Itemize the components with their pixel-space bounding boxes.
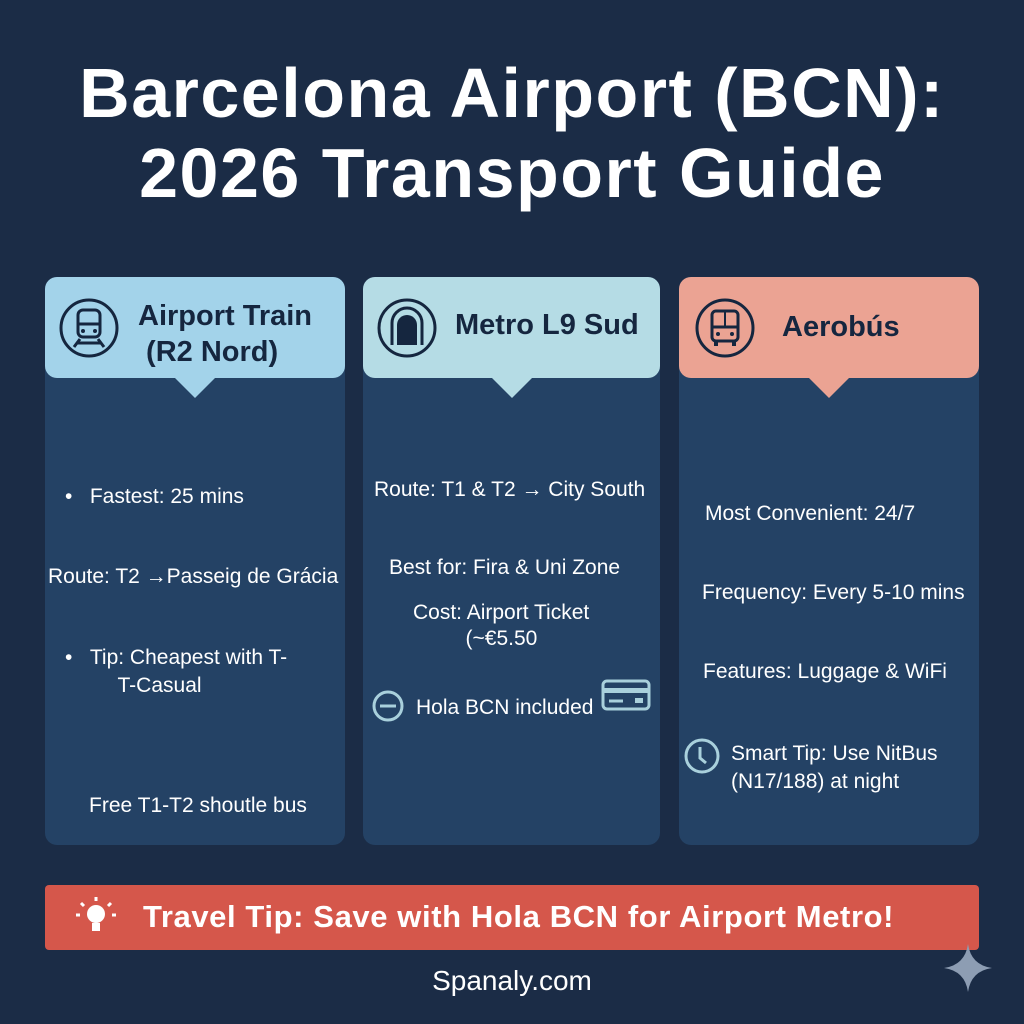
- icon: lightbulb: [76, 897, 116, 931]
- icon: bus: [696, 298, 754, 358]
- header: metro: [363, 277, 660, 378]
- text: smart tip: (N17/188) at night: [731, 770, 899, 793]
- icon: card: [602, 680, 650, 710]
- text: fastest: • Fastest: 25 mins: [65, 485, 244, 508]
- text: convenient: Most Convenient: 24/7: [705, 502, 915, 525]
- banner: travel tip: Travel Tip: Save with Hola BCN for Airport Metro!: [143, 899, 894, 934]
- title: Barcelona Airport (BCN):: [79, 54, 945, 132]
- header: airport train: Airport Train: [138, 300, 312, 332]
- header: aerobus: Aerobús: [782, 311, 900, 343]
- text: tip: [65, 646, 287, 697]
- icon: tunnel: [378, 298, 436, 358]
- header: airport train: [45, 277, 345, 378]
- icon: train: [60, 298, 118, 358]
- text: smart tip: Smart Tip: Use NitBus: [731, 742, 938, 765]
- title: [79, 54, 945, 212]
- text: cost: (~€5.50: [466, 627, 537, 650]
- header: metro: Metro L9 Sud: [455, 309, 639, 341]
- text: cost: Cost: Airport Ticket: [413, 601, 589, 624]
- panel: airport train: [45, 277, 345, 845]
- icon: minus circle: [372, 690, 404, 722]
- header: aerobus: [679, 277, 979, 378]
- text: tip: T-Casual: [118, 674, 202, 697]
- text: hola bcn: Hola BCN included: [416, 696, 593, 719]
- banner: travel tip: [45, 885, 979, 950]
- footer: Spanaly.com: [432, 965, 592, 996]
- text: route: Route: T1 & T2 → City South: [374, 478, 645, 501]
- panel: metro: [363, 277, 660, 845]
- text: route: Route: T2 →Passeig de Grácia: [48, 565, 338, 588]
- text: features: Features: Luggage & WiFi: [703, 660, 947, 683]
- header: airport train: (R2 Nord): [146, 336, 278, 368]
- text: frequency: Frequency: Every 5-10 mins: [702, 581, 965, 604]
- text: best for: Best for: Fira & Uni Zone: [389, 556, 620, 579]
- icon: clock: [684, 738, 720, 774]
- panel: aerobus: [679, 277, 979, 845]
- title: 2026 Transport Guide: [139, 134, 885, 212]
- text: hola bcn: [372, 680, 650, 722]
- text: cost: [413, 601, 590, 650]
- text: tip: • Tip: Cheapest with T-: [65, 646, 287, 669]
- text: shuttle: Free T1-T2 shoutle bus: [89, 794, 307, 817]
- text: smart tip: [684, 738, 938, 793]
- icon: sparkle: [944, 944, 992, 992]
